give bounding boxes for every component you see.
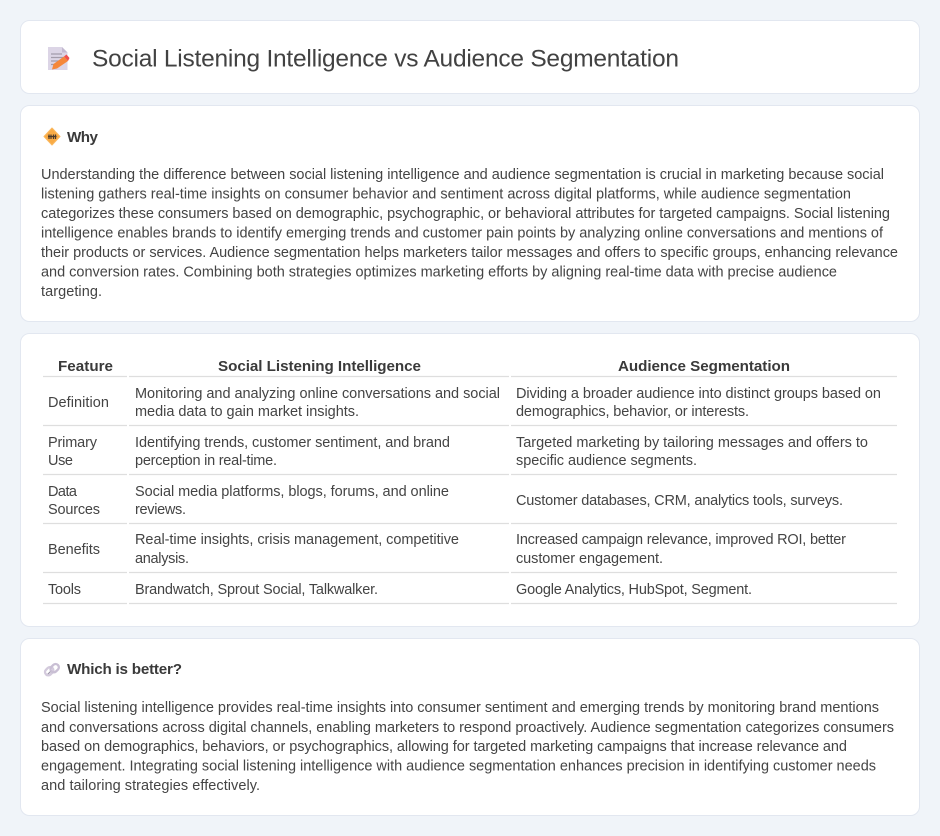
icon: diamond road sign xyxy=(44,128,60,145)
text block: why paragraph: their products or services. Audience segmentation helps marketers tailor messages and offers to specific groups, enhancing relevance xyxy=(41,245,898,261)
row: definition xyxy=(48,386,881,420)
row: tools xyxy=(48,582,752,598)
icon: chain link xyxy=(44,663,60,677)
table header: Audience Segmentation xyxy=(618,358,790,375)
row: data sources: reviews. xyxy=(135,502,186,518)
row: benefits: Real-time insights, crisis management, competitive xyxy=(135,532,459,548)
row: primary use xyxy=(48,435,868,469)
row: data sources xyxy=(48,484,843,518)
text block: which is better paragraph: and conversations across digital channels, enabling marketers to respond proactively. Audience segmentation categorizes consumers xyxy=(41,720,894,736)
row: tools: Google Analytics, HubSpot, Segment. xyxy=(516,582,752,598)
row: data sources: Customer databases, CRM, analytics tools, surveys. xyxy=(516,493,843,509)
text block: why paragraph: Understanding the difference between social listening intelligence and audience segmentation is crucial in marketing because social xyxy=(41,167,884,183)
row: definition: Dividing a broader audience into distinct groups based on xyxy=(516,386,881,402)
row: primary use: Primary xyxy=(48,435,98,451)
text block: why paragraph: and conversion rates. Combining both strategies optimizes marketing efforts by aligning real-time data with precise audience xyxy=(41,264,837,280)
heading: which is better: Which is better? xyxy=(67,661,182,678)
row: benefits: customer engagement. xyxy=(516,551,663,567)
row: tools: Brandwatch, Sprout Social, Talkwalker. xyxy=(135,582,378,598)
text block: which is better paragraph: based on demographics, behaviors, or psychographics, allowing for targeted marketing campaigns that increase relevance and xyxy=(41,739,847,755)
panel: comparison table xyxy=(20,334,920,626)
row: data sources: Data xyxy=(48,484,78,500)
table header: Social Listening Intelligence xyxy=(218,358,421,375)
icon: memo with pencil xyxy=(48,47,70,70)
row: definition: demographics, behavior, or interests. xyxy=(516,404,749,420)
row: primary use: specific audience segments. xyxy=(516,453,697,469)
row: tools: Tools xyxy=(48,582,81,598)
text block: why paragraph: categorizes these consumers based on demographic, psychographic, or behavioral attributes for targeted campaigns. Social listening xyxy=(41,206,890,222)
row: definition: media data to gain market insights. xyxy=(135,404,359,420)
panel: title xyxy=(20,20,920,94)
table header: Feature xyxy=(58,358,113,375)
row: benefits: Benefits xyxy=(48,542,100,558)
text block: which is better paragraph xyxy=(41,700,894,794)
row: benefits xyxy=(48,532,846,567)
row: definition: Definition xyxy=(48,395,109,411)
text block: why paragraph xyxy=(41,167,898,300)
row: benefits: Increased campaign relevance, improved ROI, better xyxy=(516,532,846,548)
text block: which is better paragraph: and tailoring strategies effectively. xyxy=(41,778,260,794)
heading: why: Why xyxy=(67,129,99,146)
row: primary use: Use xyxy=(48,453,73,469)
row: definition: Monitoring and analyzing online conversations and social xyxy=(135,386,500,402)
panel: why xyxy=(20,106,920,322)
text block: which is better paragraph: engagement. Integrating social listening intelligence with audience segmentation enhances precision in identifying customer needs xyxy=(41,758,876,774)
text block: why paragraph: intelligence enables brands to identify emerging trends and customer pain points by analyzing online conversations and mentions of xyxy=(41,226,884,242)
row: primary use: perception in real-time. xyxy=(135,453,277,469)
row: benefits: analysis. xyxy=(135,551,189,567)
text block: why paragraph: targeting. xyxy=(41,284,102,300)
table header xyxy=(58,358,790,375)
row: primary use: Identifying trends, customer sentiment, and brand xyxy=(135,435,450,451)
row: data sources: Sources xyxy=(48,502,100,518)
row: primary use: Targeted marketing by tailoring messages and offers to xyxy=(516,435,868,451)
text block: which is better paragraph: Social listening intelligence provides real-time insights into consumer sentiment and emerging trends by monitoring brand mentions xyxy=(41,700,879,716)
panel: which is better xyxy=(20,638,920,816)
main title: Social Listening Intelligence vs Audience Segmentation xyxy=(92,46,679,72)
row: data sources: Social media platforms, blogs, forums, and online xyxy=(135,484,449,500)
text block: why paragraph: listening gathers real-time insights on consumer behavior and sentiment across digital platforms, while audience segmentation xyxy=(41,186,851,202)
